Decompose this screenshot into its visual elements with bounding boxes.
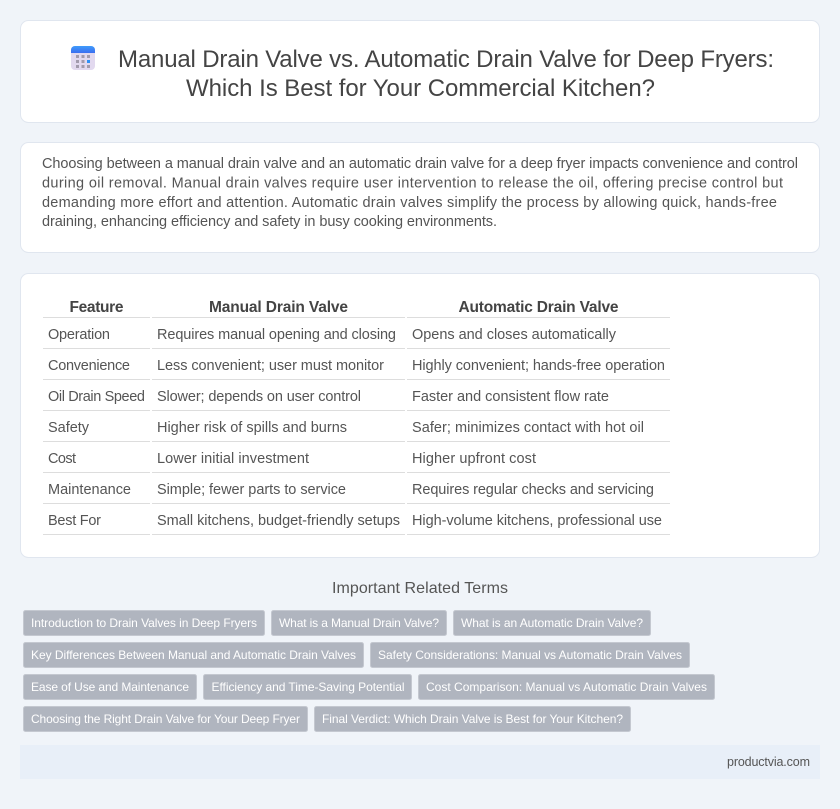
tag [314,706,630,732]
table row: maintenance: Requires regular checks and servicing [412,482,654,498]
tag: Ease of Use and Maintenance [31,680,189,694]
tag: Safety Considerations: Manual vs Automatic Drain Valves [378,648,682,662]
table row: maintenance: Simple; fewer parts to service [157,482,346,498]
heading: important related terms: Important Related Terms [332,580,508,597]
table header: Manual Drain Valve [209,299,348,316]
text block: introduction paragraph: demanding more effort and attention. Automatic drain valves simplify the process by allowing quick, hands-free [42,195,777,211]
tag: Introduction to Drain Valves in Deep Fryers [31,616,257,630]
table row: maintenance [48,482,654,498]
text block: introduction paragraph: during oil removal. Manual drain valves require user intervention to release the oil, offering precise control but [42,176,783,192]
heading: Which Is Best for Your Commercial Kitchen? [186,75,655,102]
table row: oil drain speed: Slower; depends on user control [157,389,361,405]
table row: oil drain speed: Oil Drain Speed [48,389,145,405]
table row: oil drain speed [48,389,609,405]
table row: convenience: Convenience [48,358,130,374]
tag: Key Differences Between Manual and Automatic Drain Valves [31,648,356,662]
table row: safety: Safer; minimizes contact with hot oil [412,420,644,436]
table header: Automatic Drain Valve [458,299,619,316]
table row: best for: Best For [48,513,101,529]
table row: best for [48,513,662,529]
table header: Feature [70,299,124,316]
table row: cost [48,451,536,467]
table row: safety: Safety [48,420,90,436]
table row: cost: Cost [48,451,76,467]
table row: best for: Small kitchens, budget-friendly setups [157,513,400,529]
tag [272,610,446,636]
tag: Efficiency and Time-Saving Potential [212,680,404,694]
tag: What is a Manual Drain Valve? [279,616,439,630]
icon: calendar grid [71,46,95,70]
table row: oil drain speed: Faster and consistent flow rate [412,389,609,405]
table row: convenience: Less convenient; user must monitor [157,358,384,374]
tag [24,642,364,668]
footer [20,745,820,779]
tag [204,674,412,700]
tag [24,706,308,732]
tag [454,610,650,636]
table row: maintenance: Maintenance [48,482,131,498]
heading [118,46,774,102]
tag: Cost Comparison: Manual vs Automatic Drain Valves [426,680,707,694]
panel: title [20,20,820,122]
table grid lines [43,318,670,534]
table header [70,299,619,316]
tags: related terms [24,610,714,732]
table row: cost: Higher upfront cost [412,451,536,467]
table row: convenience: Highly convenient; hands-free operation [412,358,665,374]
table row: safety: Higher risk of spills and burns [157,420,347,436]
tag [418,674,714,700]
table row: cost: Lower initial investment [157,451,309,467]
tag [24,674,196,700]
heading: Manual Drain Valve vs. Automatic Drain Valve for Deep Fryers: [118,46,774,73]
text block: introduction paragraph: draining, enhancing efficiency and safety in busy cooking environments. [42,214,497,230]
tag: What is an Automatic Drain Valve? [461,616,643,630]
table row: best for: High-volume kitchens, professional use [412,513,662,529]
text block: introduction paragraph: Choosing between a manual drain valve and an automatic drain valve for a deep fryer impacts convenience and control [42,156,798,172]
tag: Choosing the Right Drain Valve for Your Deep Fryer [31,712,300,726]
panel: introduction [20,142,820,252]
tag [24,610,264,636]
table row: operation: Opens and closes automatically [412,327,617,343]
panel: comparison table [20,274,820,558]
tag [370,642,690,668]
table row: operation: Requires manual opening and closing [157,327,396,343]
text block: introduction paragraph [42,156,798,230]
footer: productvia.com [727,755,810,769]
table row: safety [48,420,644,436]
table row: convenience [48,358,665,374]
tag: Final Verdict: Which Drain Valve is Best for Your Kitchen? [322,712,623,726]
table row: operation [48,327,617,343]
table row: operation: Operation [48,327,110,343]
